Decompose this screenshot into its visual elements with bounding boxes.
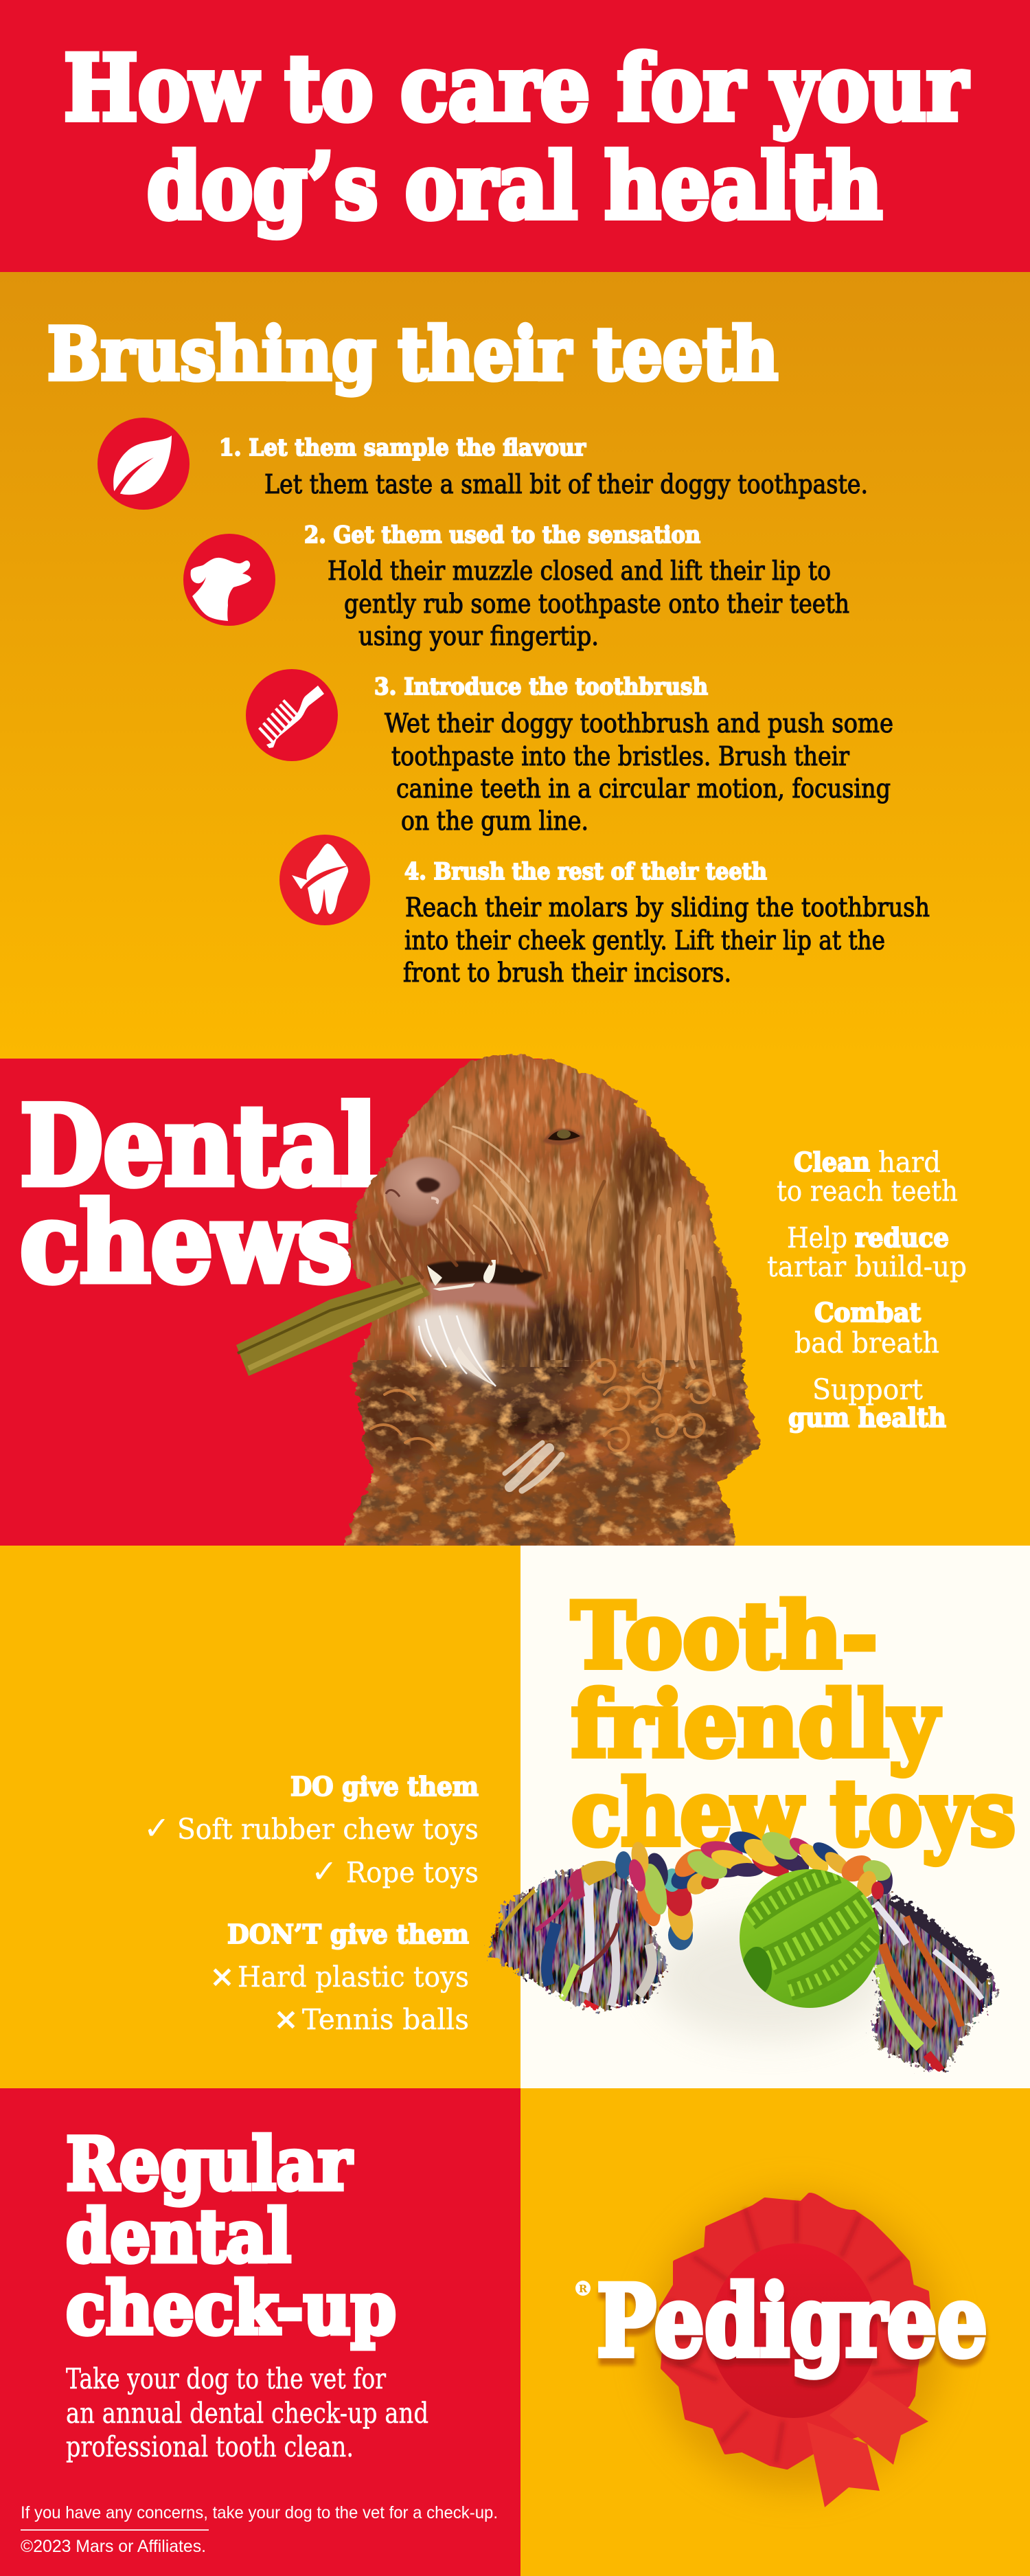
panel: tooth-friendly chew toys (474, 1546, 1030, 2088)
step 3 text (374, 673, 893, 836)
benefits list (767, 1146, 967, 1433)
step 1 text: Let them taste a small bit of their doggy toothpaste. (264, 469, 868, 499)
heading: check-up: check-up (66, 2266, 396, 2351)
step 4 text: Reach their molars by sliding the toothbrush (405, 892, 930, 923)
heading: check-up: Regular (66, 2121, 352, 2206)
paragraph: check-up: Take your dog to the vet for (66, 2362, 386, 2395)
toy shadow (652, 1917, 886, 2040)
white beard (409, 1304, 496, 1386)
fur textures (344, 1054, 761, 1546)
footnote: ©2023 Mars or Affiliates. (21, 2537, 206, 2556)
step 2 text: gently rub some toothpaste onto their teeth (344, 589, 849, 619)
heading: dental chews: chews (20, 1178, 352, 1307)
step 3 text: 3. Introduce the toothbrush (374, 673, 708, 701)
don't list: × (273, 2002, 299, 2037)
benefits list: gum health (788, 1402, 946, 1433)
benefits list: tartar build-up (767, 1250, 967, 1283)
step 2 text: using your fingertip. (358, 621, 599, 651)
heading: chew toys (571, 1583, 1016, 1866)
do list: DO give them (290, 1771, 479, 1802)
paragraph: check-up: professional tooth clean. (66, 2430, 354, 2463)
do list: ✓ (144, 1809, 170, 1846)
step 1 text: 1. Let them sample the flavour (219, 434, 586, 462)
pedigree wordmark: R (579, 2283, 588, 2295)
do list (144, 1771, 479, 1890)
panel: dental chews (0, 1054, 965, 1546)
step 4 text: into their cheek gently. Lift their lip at the (404, 925, 885, 956)
step 3 text: on the gum line. (401, 806, 588, 836)
step 4 icon: tooth with tick (279, 835, 370, 925)
panel: do and don't list (0, 1546, 520, 2088)
step 3 icon: toothbrush (246, 669, 338, 761)
illustration: rope toy and ball (474, 1827, 1009, 2085)
benefits list: Clean (794, 1146, 870, 1177)
moustache fur over mouth (371, 1199, 546, 1283)
step 3 text: canine teeth in a circular motion, focusing (396, 773, 891, 804)
panel: header (0, 0, 1030, 272)
don't list: DON’T give them (227, 1919, 469, 1950)
step 1 text (219, 434, 868, 499)
benefits list: Support (812, 1373, 923, 1406)
rosette pleats (670, 2202, 924, 2463)
step 2 text: 2. Get them used to the sensation (304, 521, 700, 549)
braided rope (615, 1827, 894, 1950)
step 3 text: toothpaste into the bristles. Brush their (391, 741, 850, 771)
nose (385, 1157, 460, 1226)
do list: Rope toys (346, 1856, 479, 1889)
do list: Soft rubber chew toys (177, 1813, 479, 1846)
heading: chew toys: Tooth- (571, 1583, 878, 1688)
benefits list: bad breath (794, 1326, 939, 1359)
heading: dental chews: Dental (20, 1081, 377, 1210)
left tassel (485, 1860, 669, 2014)
step 2 text (304, 521, 849, 651)
step 4 text: 4. Brush the rest of their teeth (404, 858, 767, 885)
heading: chew toys: friendly (571, 1671, 941, 1777)
footnote (21, 2503, 498, 2556)
heading: check-up: dental (66, 2193, 291, 2279)
rosette (649, 2195, 944, 2507)
title: dog’s oral health (147, 133, 882, 239)
green ball (740, 1869, 880, 2008)
eye (542, 1129, 585, 1145)
step 3 text: Wet their doggy toothbrush and push some (385, 708, 893, 738)
right tassel (866, 1891, 1000, 2073)
benefits list: Combat (814, 1297, 921, 1328)
don't list: Tennis balls (302, 2003, 469, 2036)
step 2 icon: dog head (183, 534, 275, 626)
curls (371, 1359, 711, 1451)
mouth and teeth (427, 1260, 542, 1309)
paragraph: check-up: an annual dental check-up and (66, 2397, 428, 2430)
benefits list: reduce (855, 1222, 949, 1253)
do list: ✓ (311, 1853, 338, 1890)
chew stick (236, 1275, 431, 1376)
paragraph: check-up (66, 2362, 428, 2463)
don't list: Hard plastic toys (238, 1961, 469, 1993)
don't list: × (209, 1959, 235, 1994)
panel: pedigree logo (520, 2088, 1030, 2576)
step 2 text: Hold their muzzle closed and lift their lip to (328, 556, 831, 586)
illustration: dog with chew (236, 1044, 783, 1559)
step 1 icon: leaf (98, 418, 190, 510)
benefits list: Help (787, 1221, 847, 1254)
ribbon tails (807, 2381, 928, 2507)
ear strands (658, 1209, 714, 1394)
panel: brushing their teeth (0, 272, 1030, 1059)
benefits list: to reach teeth (777, 1175, 958, 1208)
fur strands (371, 1127, 735, 1451)
benefits list: hard (878, 1146, 941, 1179)
heading: check-up (66, 2121, 396, 2351)
don't list (209, 1919, 469, 2037)
heading: dental chews (20, 1081, 377, 1307)
white chest patch (505, 1443, 562, 1491)
heading: brushing: Brushing their teeth (47, 311, 778, 396)
step 4 text (403, 858, 930, 988)
title (64, 35, 969, 239)
footnote: If you have any concerns, take your dog to the vet for a check-up. (21, 2503, 498, 2522)
panel: regular dental check-up (0, 2088, 520, 2576)
step 4 text: front to brush their incisors. (403, 958, 731, 988)
